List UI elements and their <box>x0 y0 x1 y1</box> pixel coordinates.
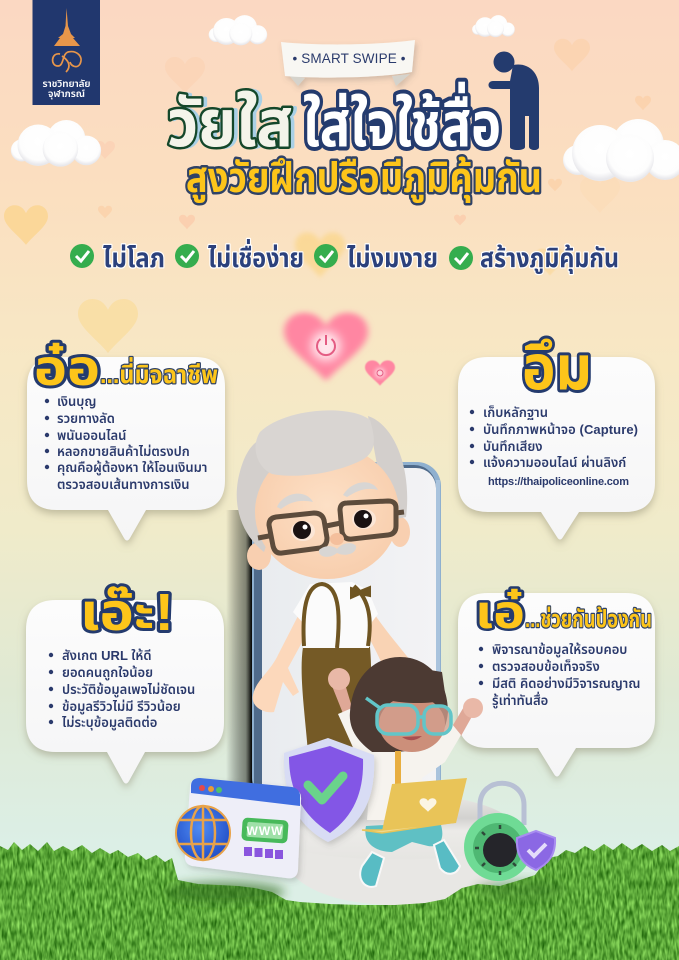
list <box>45 394 207 492</box>
list: พนันออนไลน์ <box>57 428 126 443</box>
ribbon: smart swipe: • SMART SWIPE • <box>292 51 406 66</box>
bubble: spot fakes <box>26 584 224 784</box>
phone <box>226 462 441 808</box>
sleeves <box>338 708 392 780</box>
moustache <box>319 543 356 557</box>
hair back <box>350 657 448 754</box>
purple dots <box>244 847 283 859</box>
title line 2: สูงวัยฝึกปรือมีภูมิคุ้มกัน <box>186 154 542 203</box>
list: สังเกต URL ให้ดี <box>62 648 152 663</box>
grass shadows <box>165 881 285 903</box>
item 1: ไม่โลภ <box>103 243 165 273</box>
background hearts <box>4 39 651 353</box>
bow tie <box>351 587 370 598</box>
item 3: ไม่งมงาย <box>347 243 438 273</box>
list: คุณคือผู้ต้องหา ให้โอนเงินมา <box>57 460 207 475</box>
list: ข้อมูลรีวิวไม่มี รีวิวน้อย <box>62 699 181 714</box>
cloud top right <box>472 15 515 37</box>
glasses <box>366 698 451 734</box>
list: เก็บหลักฐาน <box>483 405 548 420</box>
heading: เอ๋ <box>475 586 525 638</box>
heading: เอ๊ะ! <box>80 584 174 642</box>
list: รวยทางลัด <box>57 411 115 426</box>
item 3 <box>314 243 438 273</box>
ticks <box>475 825 516 875</box>
list <box>470 405 638 488</box>
hair top <box>256 410 374 476</box>
item 4: สร้างภูมิคุ้มกัน <box>480 243 619 274</box>
forearms <box>332 684 354 716</box>
elderly man character <box>237 410 410 785</box>
icon: small pink heart <box>365 360 395 386</box>
girl character <box>328 657 483 887</box>
fringe <box>388 665 446 703</box>
title line 1 right: ใส่ใจใช้สื่อ <box>303 81 501 160</box>
eyes <box>291 521 315 541</box>
title line 1 left: วัยใส <box>171 86 297 160</box>
smile <box>402 736 422 740</box>
subheading: ...นี่มิจฉาชีพ <box>100 357 218 389</box>
list: ไม่ระบุข้อมูลติดต่อ <box>61 715 157 730</box>
list <box>479 642 640 708</box>
padlock <box>464 783 555 881</box>
list: หลอกขายสินค้าไม่ตรงปก <box>57 444 190 459</box>
hair sides <box>237 416 407 552</box>
icon: spire <box>54 8 80 46</box>
list: ประวัติข้อมูลเพจไม่ชัดเจน <box>62 682 195 697</box>
legs <box>365 822 442 852</box>
eyebrows <box>277 494 313 509</box>
list: รู้เท่าทันสื่อ <box>492 691 548 708</box>
torso <box>367 752 425 820</box>
list: ยอดคนถูกใจน้อย <box>62 665 153 680</box>
list: ตรวจสอบข้อเท็จจริง <box>492 659 600 674</box>
list: บันทึกภาพหน้าจอ (Capture) <box>483 422 638 437</box>
logo: จุฬาภรณ์ <box>48 88 85 100</box>
glasses <box>258 501 404 553</box>
list: มีสติ คิดอย่างมีวิจารณญาณ <box>492 676 640 691</box>
far arm <box>362 612 410 664</box>
trousers <box>302 647 371 785</box>
heading: อึม <box>522 334 592 403</box>
bubble: protect together <box>458 586 655 776</box>
list: ตรวจสอบเส้นทางการเงิน <box>57 477 190 492</box>
podium <box>276 793 520 905</box>
bubble: scam warning <box>27 340 225 540</box>
shirt <box>293 582 378 648</box>
fists <box>328 668 350 690</box>
face <box>379 696 445 752</box>
near arm and hand <box>253 612 312 712</box>
logo text: ราชวิทยาลัย <box>42 78 90 90</box>
laptop <box>382 778 467 831</box>
logo <box>32 0 100 105</box>
browser window <box>176 778 301 878</box>
list: แจ้งความออนไลน์ ผ่านลิงก์ <box>483 455 626 470</box>
list: https://thaipoliceonline.com <box>488 476 629 488</box>
check <box>308 776 343 800</box>
heading: อ๋อ <box>34 340 100 396</box>
cloud left <box>11 120 101 167</box>
list: บันทึกเสียง <box>483 439 543 454</box>
grass <box>0 842 679 960</box>
list: พิจารณาข้อมูลให้รอบคอบ <box>492 642 627 657</box>
title line 1 left: วัยใส <box>167 86 293 160</box>
small shield <box>517 831 555 870</box>
bubble: collect evidence <box>458 334 655 540</box>
ribbon: smart swipe <box>281 40 415 86</box>
checklist <box>70 239 619 274</box>
item 1 <box>70 243 165 273</box>
shield <box>284 738 374 842</box>
www badge: WWW <box>247 824 283 838</box>
face <box>255 445 399 579</box>
suspenders <box>304 584 370 648</box>
shoes <box>360 852 384 887</box>
cloud right <box>563 119 679 182</box>
globe <box>176 806 230 860</box>
ears <box>247 542 271 570</box>
icon: elderly person <box>488 52 539 150</box>
cloud top left <box>209 15 267 45</box>
icon: big pink heart <box>284 313 368 381</box>
list <box>49 648 195 730</box>
laptop heart <box>420 798 436 812</box>
item 2: ไม่เชื่อง่าย <box>208 239 304 273</box>
list: เงินบุญ <box>57 394 96 409</box>
item 2 <box>175 239 304 273</box>
window buttons <box>199 785 205 791</box>
nose <box>330 533 344 545</box>
icon: monogram <box>53 52 81 72</box>
